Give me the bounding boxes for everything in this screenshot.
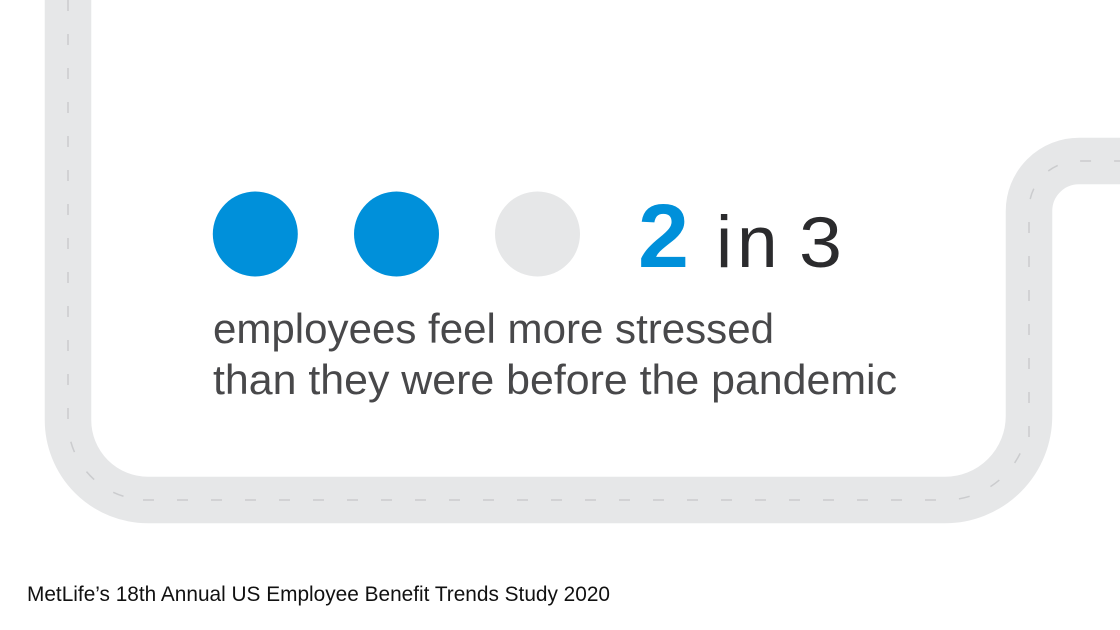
text: description [213,305,897,403]
statistic: 2 in 3: 2 [638,187,689,287]
statistic: 2 in 3: 3 [799,204,842,283]
text: description: than they were before the pandemic [213,356,897,403]
source note: MetLife’s 18th Annual US Employee Benefit Trends Study 2020 [27,583,610,606]
road centre dashes: left section [68,0,133,499]
statistic: 2 in 3 [638,187,842,287]
icon: dots 2 of 3 [213,192,580,276]
text: description: employees feel more stressed [213,305,774,352]
statistic: 2 in 3: in [716,202,778,283]
road path [68,0,1120,500]
